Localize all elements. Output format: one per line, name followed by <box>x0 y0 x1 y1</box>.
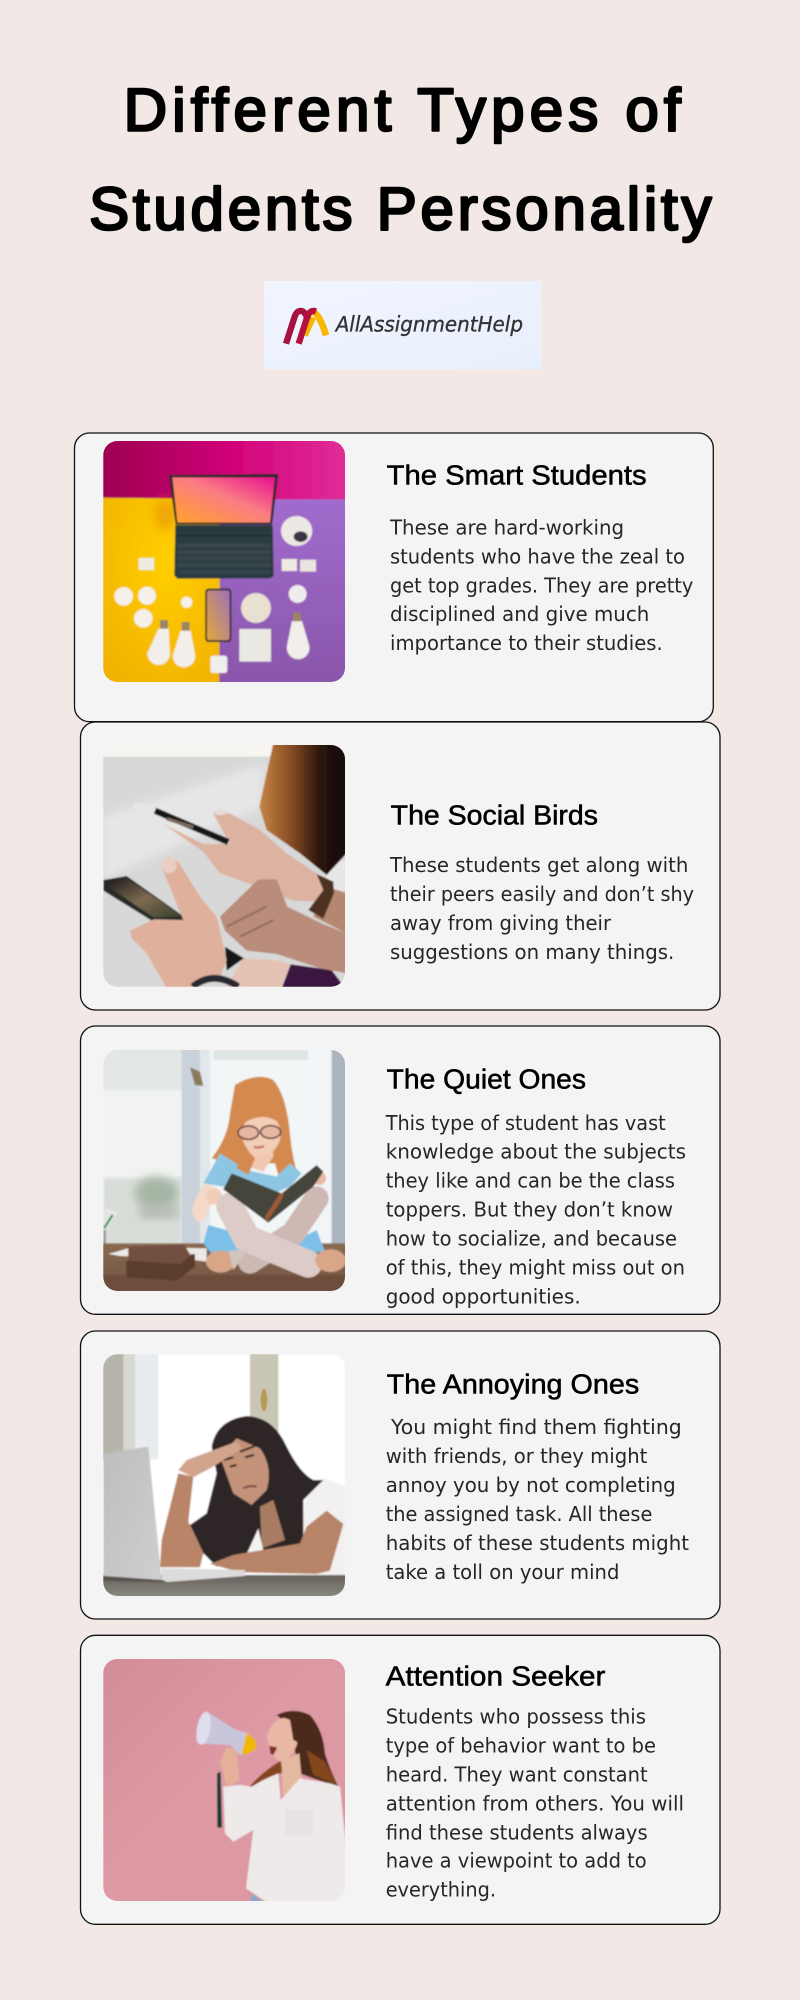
image: tablet and smart devices on colored paper <box>102 439 347 683</box>
text block: Social Birds description: their peers easily and don’t shy <box>390 882 694 906</box>
text block: Quiet Ones description: of this, they might miss out on <box>386 1255 685 1279</box>
heading: The Social Birds: The Social Birds <box>391 799 598 830</box>
text block: Annoying Ones description: with friends, or they might <box>386 1444 648 1468</box>
text block: Annoying Ones description: the assigned task. All these <box>386 1502 652 1526</box>
text block: Attention Seeker description: find these students always <box>386 1820 648 1844</box>
text block: Annoying Ones description: You might find them fighting <box>390 1415 682 1439</box>
title <box>89 76 712 242</box>
logo: AllAssignmentHelp <box>264 281 542 369</box>
text block: Quiet Ones description: good opportunities. <box>386 1284 581 1308</box>
text block: Smart Students description: disciplined and give much <box>390 602 649 626</box>
image: hands holding smartphones <box>102 742 347 990</box>
text block: Quiet Ones description: This type of student has vast <box>385 1111 666 1135</box>
image: frustrated woman at a laptop <box>102 1353 347 1598</box>
text block: Quiet Ones description: they like and can be the class <box>386 1168 675 1192</box>
heading: The Annoying Ones: The Annoying Ones <box>387 1368 639 1399</box>
panel: The Quiet Ones <box>80 1026 720 1314</box>
text block: Quiet Ones description: how to socialize, and because <box>386 1226 677 1250</box>
text block: Attention Seeker description: have a viewpoint to add to <box>386 1848 647 1872</box>
panel: The Smart Students <box>74 433 713 722</box>
image: girl reading a book by a window <box>102 1048 347 1293</box>
text block: Social Birds description <box>389 853 694 964</box>
text block: Smart Students description <box>389 515 693 655</box>
text block: Social Birds description: away from giving their <box>390 911 612 935</box>
text block: Quiet Ones description <box>385 1111 686 1308</box>
heading: The Quiet Ones: The Quiet Ones <box>387 1063 586 1094</box>
text block: Quiet Ones description: toppers. But they don’t know <box>386 1197 673 1221</box>
text block: Annoying Ones description: habits of these students might <box>386 1531 689 1555</box>
icon: logo mark <box>286 311 326 344</box>
heading: The Smart Students: The Smart Students <box>387 459 647 490</box>
heading: Attention Seeker: Attention Seeker <box>386 1660 605 1691</box>
text block: Attention Seeker description: everything. <box>386 1877 496 1901</box>
text block: Smart Students description: get top grades. They are pretty <box>390 573 693 597</box>
panel: The Annoying Ones <box>80 1331 720 1619</box>
title: Different Types of <box>124 76 681 143</box>
text block: Attention Seeker description: attention from others. You will <box>386 1791 684 1815</box>
text block: Attention Seeker description: type of behavior want to be <box>386 1733 656 1757</box>
text block: Social Birds description: suggestions on many things. <box>390 940 674 964</box>
text block: Smart Students description: These are hard-working <box>389 515 624 539</box>
text block: Smart Students description: students who have the zeal to <box>390 544 685 568</box>
text block: Quiet Ones description: knowledge about the subjects <box>386 1140 686 1164</box>
logo: AllAssignmentHelp: AllAssignmentHelp <box>334 313 523 337</box>
text block: Annoying Ones description: take a toll on your mind <box>386 1560 619 1584</box>
text block: Smart Students description: importance to their studies. <box>390 631 663 655</box>
image: woman shouting into a megaphone <box>102 1657 347 1903</box>
panel: The Social Birds <box>80 722 720 1010</box>
text block: Social Birds description: These students get along with <box>389 853 688 877</box>
text block: Attention Seeker description: heard. They want constant <box>386 1762 648 1786</box>
panel: Attention Seeker <box>80 1635 720 1924</box>
text block: Annoying Ones description <box>386 1415 689 1584</box>
title: Students Personality <box>89 175 712 242</box>
text block: Annoying Ones description: annoy you by not completing <box>386 1473 676 1497</box>
text block: Attention Seeker description: Students who possess this <box>386 1704 646 1728</box>
text block: Attention Seeker description <box>386 1704 684 1901</box>
